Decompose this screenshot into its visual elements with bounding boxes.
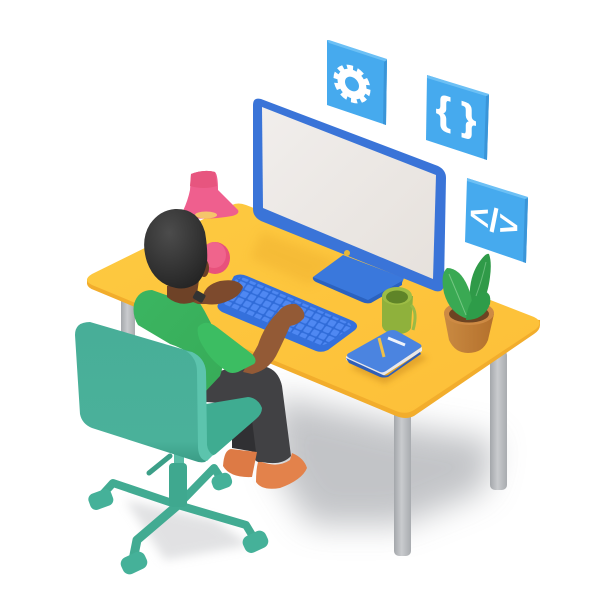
- monitor screen: [262, 107, 436, 279]
- right arm and hand: [243, 304, 304, 374]
- power button: [344, 250, 350, 256]
- floating icon: code tag: [465, 178, 528, 263]
- pot: [444, 314, 494, 353]
- person: [134, 209, 307, 489]
- notebook: [346, 330, 422, 378]
- floating icon: curly braces: { }: [436, 87, 476, 142]
- legs: dark trousers: [205, 365, 291, 463]
- monitor: [253, 99, 446, 291]
- mug: [382, 287, 415, 334]
- floating icon: curly braces: [426, 75, 489, 160]
- hair: [144, 209, 207, 288]
- torso: green shirt: [134, 290, 223, 392]
- label: [388, 338, 405, 345]
- left hand and arm: [193, 280, 243, 304]
- wristwatch: [192, 290, 206, 303]
- chair base: [103, 456, 255, 560]
- desk legs: [121, 296, 507, 556]
- floating icon: gear: [327, 40, 387, 125]
- seat: [205, 397, 262, 456]
- neck: [167, 280, 199, 304]
- floating icon: code tag: </>: [469, 194, 519, 248]
- ear: [199, 259, 209, 277]
- seat back: [75, 322, 212, 462]
- leaves: [470, 254, 491, 303]
- feet: orange shoes: [223, 449, 257, 477]
- office chair: [75, 322, 271, 577]
- desk lamp: [183, 171, 238, 274]
- gas cylinder: [169, 452, 187, 507]
- floor shadow: [125, 395, 495, 560]
- casters: [87, 471, 271, 577]
- plant: [443, 254, 494, 353]
- monitor stand: [313, 255, 404, 303]
- sleeve: [198, 323, 256, 373]
- pencil: [379, 338, 384, 357]
- desk top: [87, 204, 540, 418]
- keyboard: [217, 274, 357, 352]
